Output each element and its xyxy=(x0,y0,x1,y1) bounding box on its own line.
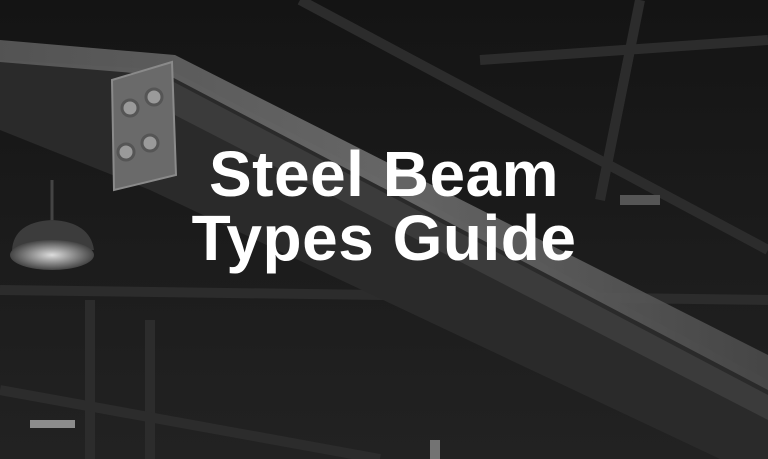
hanging lamp xyxy=(10,180,94,270)
title: Types Guide xyxy=(192,202,576,274)
main beam top surface xyxy=(0,40,768,390)
title: Steel Beam xyxy=(209,138,559,210)
title xyxy=(192,138,576,274)
end plate xyxy=(112,62,176,190)
distant lights xyxy=(30,420,75,428)
